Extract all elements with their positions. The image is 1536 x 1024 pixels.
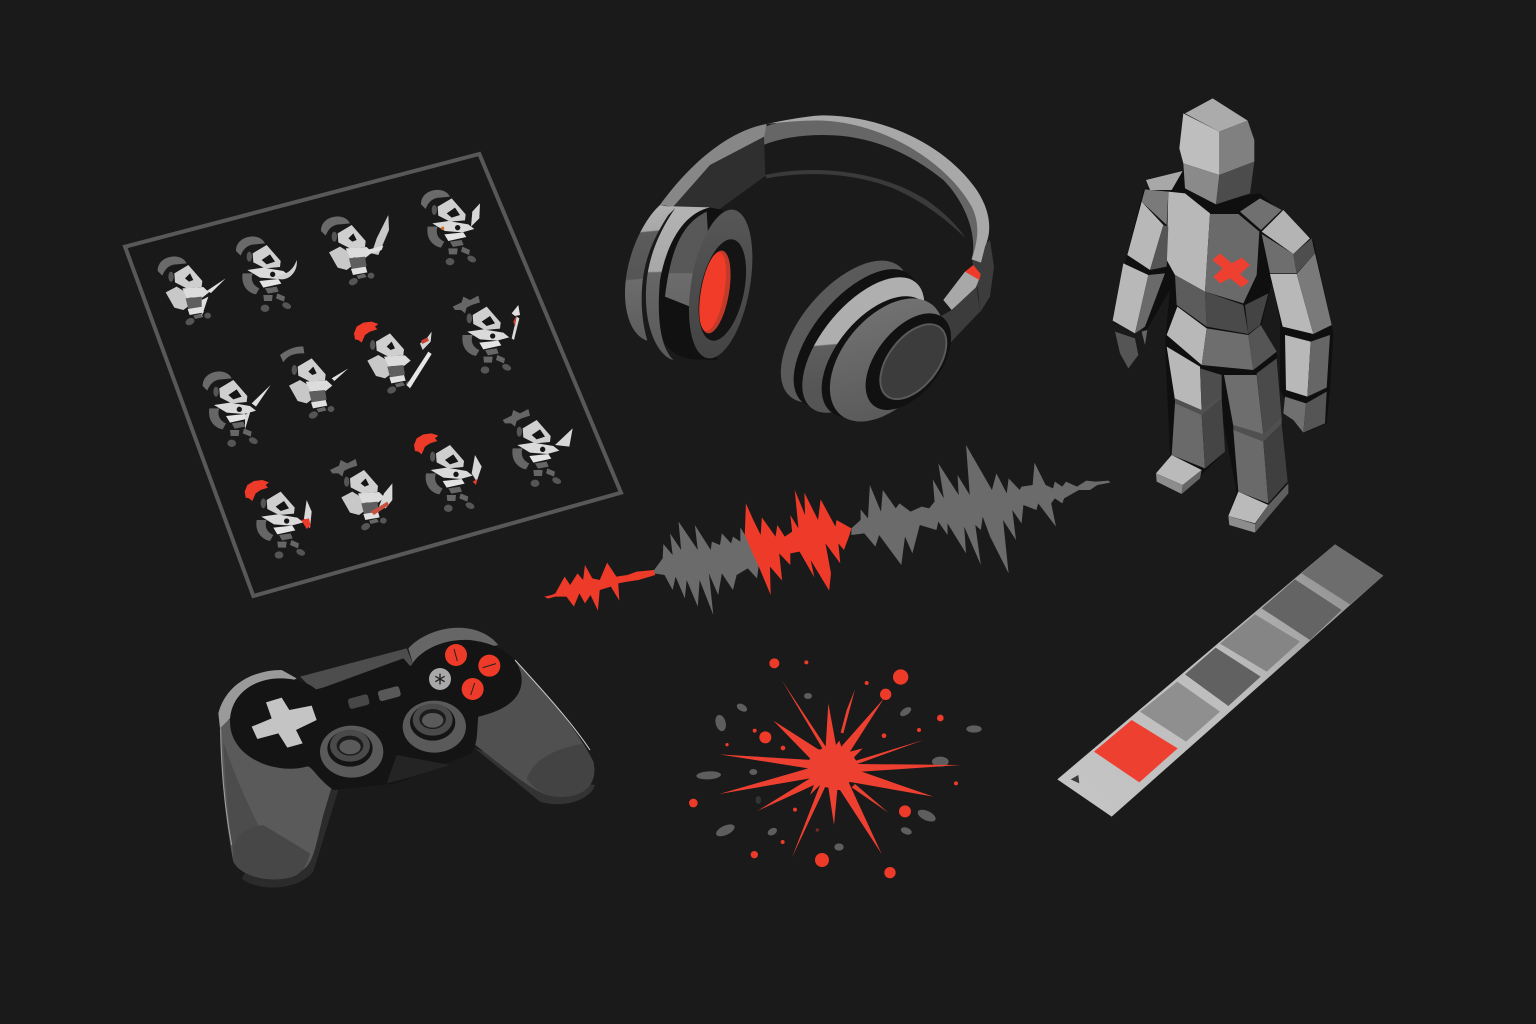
right shoulder rim — [408, 628, 498, 665]
right cup middle ring — [780, 256, 947, 434]
left shoulder rim — [218, 670, 297, 728]
knight sprite row 2 col 3 red plume — [354, 322, 432, 395]
right driver disc — [867, 312, 959, 411]
detached spike lower — [852, 784, 888, 813]
left ear cup — [625, 205, 763, 363]
red button right — [478, 655, 500, 677]
controller body — [230, 640, 522, 790]
small button left — [347, 694, 370, 709]
red x mark — [1212, 253, 1250, 287]
top edge — [300, 648, 413, 690]
swatch 4 — [1220, 614, 1300, 672]
waveform segment red 1 — [544, 563, 655, 611]
knight sprite row 2 col 4 — [453, 296, 520, 374]
left cup flat — [665, 212, 710, 307]
dpad — [252, 698, 317, 748]
headphones — [625, 115, 994, 443]
swatch 3 — [1185, 648, 1261, 706]
red button top — [445, 644, 467, 666]
headband left highlight — [660, 124, 767, 207]
red hinge band — [965, 265, 981, 280]
red button bottom — [462, 678, 484, 700]
mannequin gaps — [1113, 170, 1333, 533]
red starburst explosion — [689, 658, 982, 878]
knight sprite row 1 col 1 — [158, 257, 226, 327]
right thumbstick — [403, 701, 466, 753]
knight sprite row 2 col 2 — [280, 346, 348, 420]
headband — [660, 116, 988, 260]
colour swatch strip — [1057, 544, 1383, 817]
lower body shade — [387, 755, 450, 783]
panel: sprite sheet — [125, 154, 621, 596]
right grip — [473, 660, 595, 804]
right hinge back — [972, 240, 994, 312]
swatch 2 — [1140, 682, 1220, 742]
knight sprite row 1 col 2 — [236, 237, 297, 312]
left cup black interior — [653, 207, 723, 360]
sprite sheet frame — [125, 154, 621, 596]
strip base — [1057, 544, 1383, 817]
mannequin left arm — [1113, 171, 1183, 368]
gray star button — [429, 668, 451, 690]
triangle marker — [1071, 775, 1079, 783]
left cup middle ring — [646, 206, 710, 360]
headband highlight — [767, 115, 989, 263]
right black ring — [849, 298, 968, 425]
waveform segment red 2 — [745, 490, 851, 595]
mannequin right leg — [1224, 358, 1288, 533]
left cup outer ring — [625, 205, 675, 341]
left driver red — [694, 248, 736, 336]
knight sprite row 2 col 1 — [203, 372, 271, 447]
swatch red — [1094, 720, 1178, 782]
left thumbstick — [320, 726, 383, 778]
right cup body — [807, 277, 966, 443]
red droplets — [689, 658, 958, 878]
knight sprite row 3 col 2 — [330, 459, 392, 532]
mannequin head — [1179, 98, 1254, 204]
mannequin torso — [1167, 192, 1277, 370]
right arm light — [943, 272, 980, 310]
left ear pad — [679, 205, 763, 363]
knight sprite row 1 col 3 — [321, 215, 389, 287]
inner band line — [765, 170, 966, 238]
right ear cup — [757, 238, 981, 443]
left grip — [220, 715, 338, 888]
mannequin right arm — [1240, 198, 1332, 433]
small button right — [377, 686, 401, 702]
audio waveform — [544, 445, 1110, 615]
waveform segment gray 2 — [851, 445, 1110, 573]
headband pad — [673, 137, 765, 210]
swatch 5 — [1262, 579, 1342, 640]
right cup back ring — [757, 238, 933, 425]
burst core — [719, 680, 961, 857]
knight sprite row 1 col 4 — [421, 190, 480, 265]
mannequin left leg — [1156, 347, 1225, 494]
knight sprite row 3 col 1 red plume — [245, 480, 312, 559]
knight sprite row 3 col 3 red plume — [414, 433, 482, 512]
game controller — [218, 628, 595, 888]
waveform segment gray 1 — [654, 522, 759, 615]
right arm dark — [930, 287, 980, 347]
strip top section — [1302, 544, 1383, 604]
detached spikes — [841, 689, 855, 733]
gray debris — [696, 693, 982, 851]
knight sprite row 3 col 4 — [503, 409, 573, 487]
low-poly mannequin figure — [1113, 98, 1333, 533]
